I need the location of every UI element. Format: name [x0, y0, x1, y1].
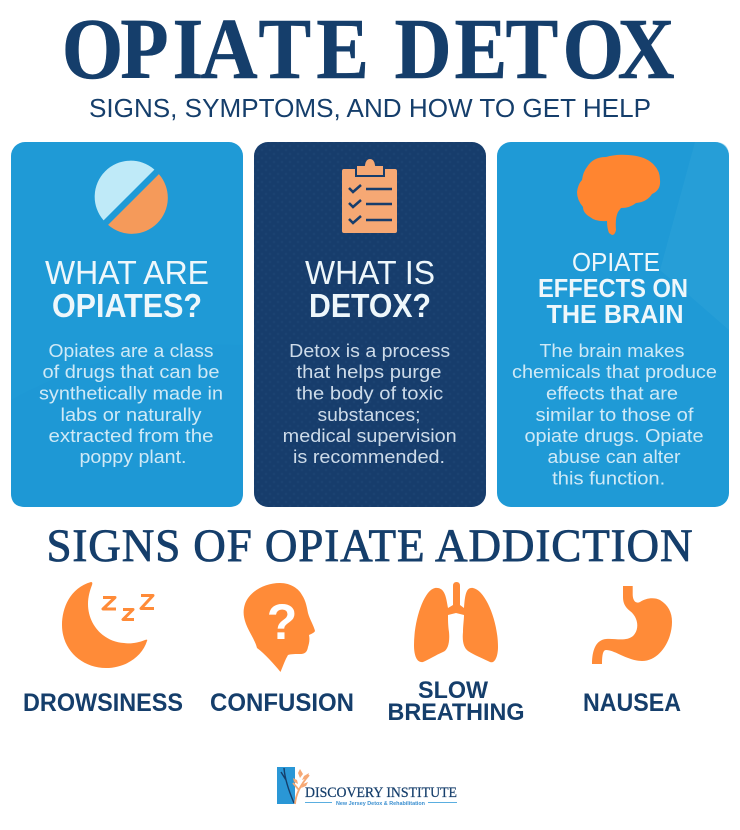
heading: opiate effects on the brain: THE BRAIN [546, 299, 684, 329]
text: what is detox: substances; [318, 404, 420, 425]
logo: discovery institute: New Jersey Detox & Rehabilitation [336, 801, 426, 807]
label: slow breathing: BREATHING [388, 699, 524, 726]
text: what are opiates: of drugs that can be [42, 361, 220, 382]
text: opiate effects on the brain: The brain makes [540, 340, 684, 361]
text: what is detox: medical supervision [283, 425, 457, 446]
text: opiate effects on the brain: opiate drugs. Opiate [524, 425, 704, 446]
label: nausea: NAUSEA [583, 689, 681, 717]
text: what is detox: the body of toxic [296, 382, 443, 404]
label: slow breathing: SLOW [418, 677, 488, 704]
icon: brain [577, 155, 660, 235]
heading: what are opiates: WHAT ARE [45, 254, 209, 291]
text: what are opiates: extracted from the [48, 425, 214, 446]
text: what are opiates: Opiates are a class [48, 340, 214, 361]
text: what are opiates: labs or naturally [60, 404, 202, 425]
text: opiate effects on the brain [512, 340, 717, 488]
heading: what is detox [305, 254, 435, 324]
text: opiate effects on the brain: similar to those of [536, 404, 694, 425]
text: opiate effects on the brain: this function. [552, 468, 665, 488]
heading: what are opiates: OPIATES? [52, 287, 202, 324]
label: slow breathing [388, 677, 524, 726]
text: what are opiates: synthetically made in [39, 382, 223, 404]
subtitle: SIGNS, SYMPTOMS, AND HOW TO GET HELP [89, 93, 651, 123]
panel: what are opiates [11, 142, 243, 507]
icon: stomach [592, 586, 672, 664]
heading: opiate effects on the brain: OPIATE [572, 247, 660, 277]
heading: opiate effects on the brain [538, 247, 688, 329]
logo: discovery institute [277, 767, 457, 807]
icon: clipboard [342, 158, 397, 233]
text: opiate effects on the brain: effects that are [546, 382, 678, 404]
text: opiate effects on the brain: abuse can alter [548, 446, 680, 467]
icon: moon with zzz [62, 582, 154, 668]
text: what is detox [283, 340, 457, 467]
heading: signs of opiate addiction: SIGNS OF OPIATE ADDICTION [46, 519, 693, 571]
panel: opiate effects on the brain [497, 142, 729, 507]
icon: head with question mark: ? [267, 594, 297, 650]
heading: opiate effects on the brain: EFFECTS ON [538, 273, 688, 303]
icon: pill [95, 161, 168, 234]
text: opiate effects on the brain: chemicals that produce [512, 361, 717, 382]
text: what are opiates: poppy plant. [80, 446, 186, 467]
heading: what is detox: WHAT IS [305, 254, 435, 291]
title: OPIATE DETOX [62, 1, 675, 97]
logo: discovery institute: DISCOVERY INSTITUTE [305, 785, 457, 801]
label: drowsiness: DROWSINESS [23, 689, 183, 717]
label: confusion: CONFUSION [210, 689, 354, 717]
heading: what is detox: DETOX? [309, 287, 431, 324]
panel: what is detox [254, 142, 486, 507]
icon: head with question mark [244, 583, 315, 672]
icon: lungs [414, 582, 498, 662]
text: what is detox: is recommended. [293, 446, 445, 467]
text: what is detox: that helps purge [296, 361, 442, 382]
text: what are opiates [39, 340, 223, 467]
heading: what are opiates [45, 254, 209, 324]
text: what is detox: Detox is a process [289, 340, 450, 361]
